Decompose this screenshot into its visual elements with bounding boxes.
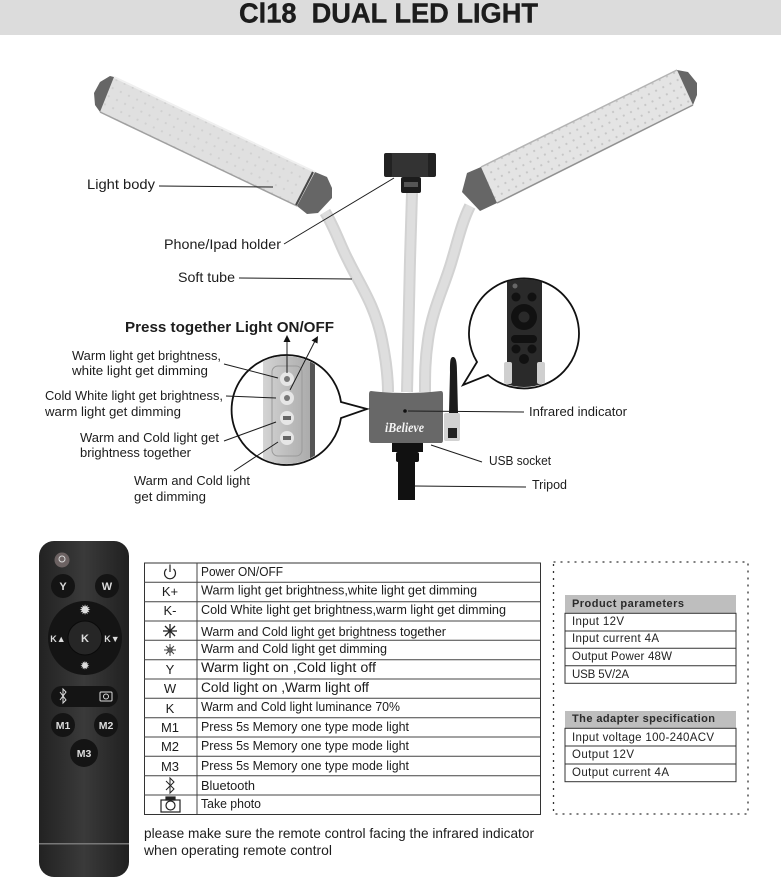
button: bluetooth and camera: [51, 686, 118, 707]
phone holder: [384, 153, 436, 193]
soft tubes: [325, 193, 470, 392]
button: W: [95, 574, 119, 598]
control box: iBelieve: [385, 421, 424, 436]
right light body: [462, 70, 697, 211]
button: W: W: [102, 581, 113, 593]
left light body: [94, 76, 332, 214]
tripod: [392, 443, 423, 500]
note: remote control usage: please make sure the remote control facing the infrared indicator: [144, 825, 534, 841]
table: product parameters: Input current 4A: [572, 633, 659, 645]
callout: side button panel: [232, 355, 367, 465]
label: phone holder: [164, 178, 394, 252]
table: product parameters: USB 5V/2A: [572, 669, 629, 681]
label: tripod: Tripod: [532, 477, 567, 492]
icon: bluetooth: [166, 778, 174, 793]
control box: [369, 391, 443, 443]
label: dimming button: [134, 442, 278, 504]
remote control: [39, 541, 129, 877]
table: remote button functions: Cold White light get brightness,warm light get dimming: [201, 603, 506, 617]
callout: remote facing infrared indicator: [463, 275, 579, 393]
table: remote button functions: W: [164, 681, 177, 696]
antenna and clip: [444, 357, 460, 441]
note: remote control usage: when operating remote control: [143, 842, 332, 858]
label: infrared indicator: Infrared indicator: [529, 404, 628, 419]
note: remote control usage: [143, 825, 534, 858]
label: brightness together button: Warm and Cold light get: [80, 430, 219, 445]
table: adapter specification: [565, 711, 736, 782]
table: remote button functions: K+: [162, 584, 178, 599]
label: brightness together button: [80, 422, 276, 460]
table: remote button functions: Press 5s Memory one type mode light: [201, 759, 410, 773]
label: dimming button: get dimming: [134, 489, 206, 504]
table: remote button functions: Cold light on ,Warm light off: [201, 680, 369, 695]
button: M2: M2: [99, 720, 113, 732]
icon: large sun: [163, 624, 177, 638]
table: remote button functions: M3: [161, 759, 179, 774]
heading: press together: Press together Light ON/OFF: [125, 319, 334, 336]
button: power: [54, 552, 70, 568]
button: M1: M1: [56, 720, 70, 732]
directional ring: K▲: [50, 634, 66, 644]
label: soft tube: Soft tube: [178, 269, 235, 285]
table: remote button functions: Press 5s Memory one type mode light: [201, 739, 410, 753]
title band: [0, 0, 781, 35]
button: Y: [51, 574, 75, 598]
label: USB socket: [431, 445, 551, 468]
label: light body: Light body: [87, 176, 155, 192]
table: remote button functions: Warm light on ,Cold light off: [201, 660, 376, 675]
directional ring: K: [81, 633, 89, 645]
label: phone holder: Phone/Ipad holder: [164, 236, 281, 252]
table: remote button functions: Bluetooth: [201, 779, 255, 793]
table: remote button functions: Warm and Cold light get dimming: [201, 642, 387, 656]
icon: small sun: [164, 644, 176, 656]
product diagram: dual LED light: [94, 70, 697, 500]
directional ring: [48, 601, 122, 675]
button: Y: Y: [59, 581, 67, 593]
table: remote button functions: M1: [161, 720, 179, 735]
directional ring: ✹: [80, 660, 90, 672]
label: cold light button: Cold White light get brightness,: [45, 388, 223, 403]
table: remote button functions: Warm light get brightness,white light get dimming: [201, 584, 477, 598]
table: adapter specification: The adapter specification: [572, 713, 715, 725]
button: M2: [94, 713, 118, 737]
table: remote button functions: K-: [164, 603, 176, 618]
label: dimming button: Warm and Cold light: [134, 473, 250, 488]
label: brightness together button: brightness together: [80, 445, 192, 460]
table: remote button functions: M2: [161, 739, 179, 754]
table: remote button functions: Y: [166, 662, 175, 677]
table: remote button functions: Warm and Cold light get brightness together: [201, 625, 446, 639]
table: product parameters: Input 12V: [572, 616, 624, 628]
table: adapter specification: Output current 4A: [572, 767, 669, 779]
label: USB socket: USB socket: [489, 453, 551, 468]
table: remote button functions: K: [166, 701, 175, 716]
label: warm light button: white light get dimming: [71, 363, 208, 378]
icon: camera: [161, 797, 180, 812]
table: remote button functions: [144, 563, 540, 814]
table: product parameters: Output Power 48W: [572, 651, 672, 663]
panel: specifications: [554, 562, 748, 814]
table: remote button functions: Take photo: [201, 797, 261, 811]
directional ring: ✹: [79, 603, 91, 617]
table: adapter specification: Output 12V: [572, 749, 634, 761]
icon: power: [164, 564, 176, 579]
table: adapter specification: Input voltage 100-240ACV: [572, 732, 714, 744]
label: cold light button: [44, 388, 276, 419]
table: product parameters: Product parameters: [572, 598, 684, 610]
button: M3: [70, 739, 98, 767]
label: cold light button: warm light get dimming: [44, 404, 181, 419]
table: product parameters: [565, 595, 736, 683]
labels and leader lines: [44, 176, 628, 504]
table: remote button functions: Warm and Cold light luminance 70%: [201, 700, 400, 714]
directional ring: K▼: [104, 634, 120, 644]
table: remote button functions: Press 5s Memory one type mode light: [201, 720, 410, 734]
label: warm light button: Warm light get brightness,: [72, 348, 221, 363]
table: remote button functions: Power ON/OFF: [201, 565, 283, 579]
label: warm light button: [71, 348, 278, 378]
button: M1: [51, 713, 75, 737]
arrows: press together: [284, 335, 318, 390]
button: M3: M3: [77, 748, 91, 760]
